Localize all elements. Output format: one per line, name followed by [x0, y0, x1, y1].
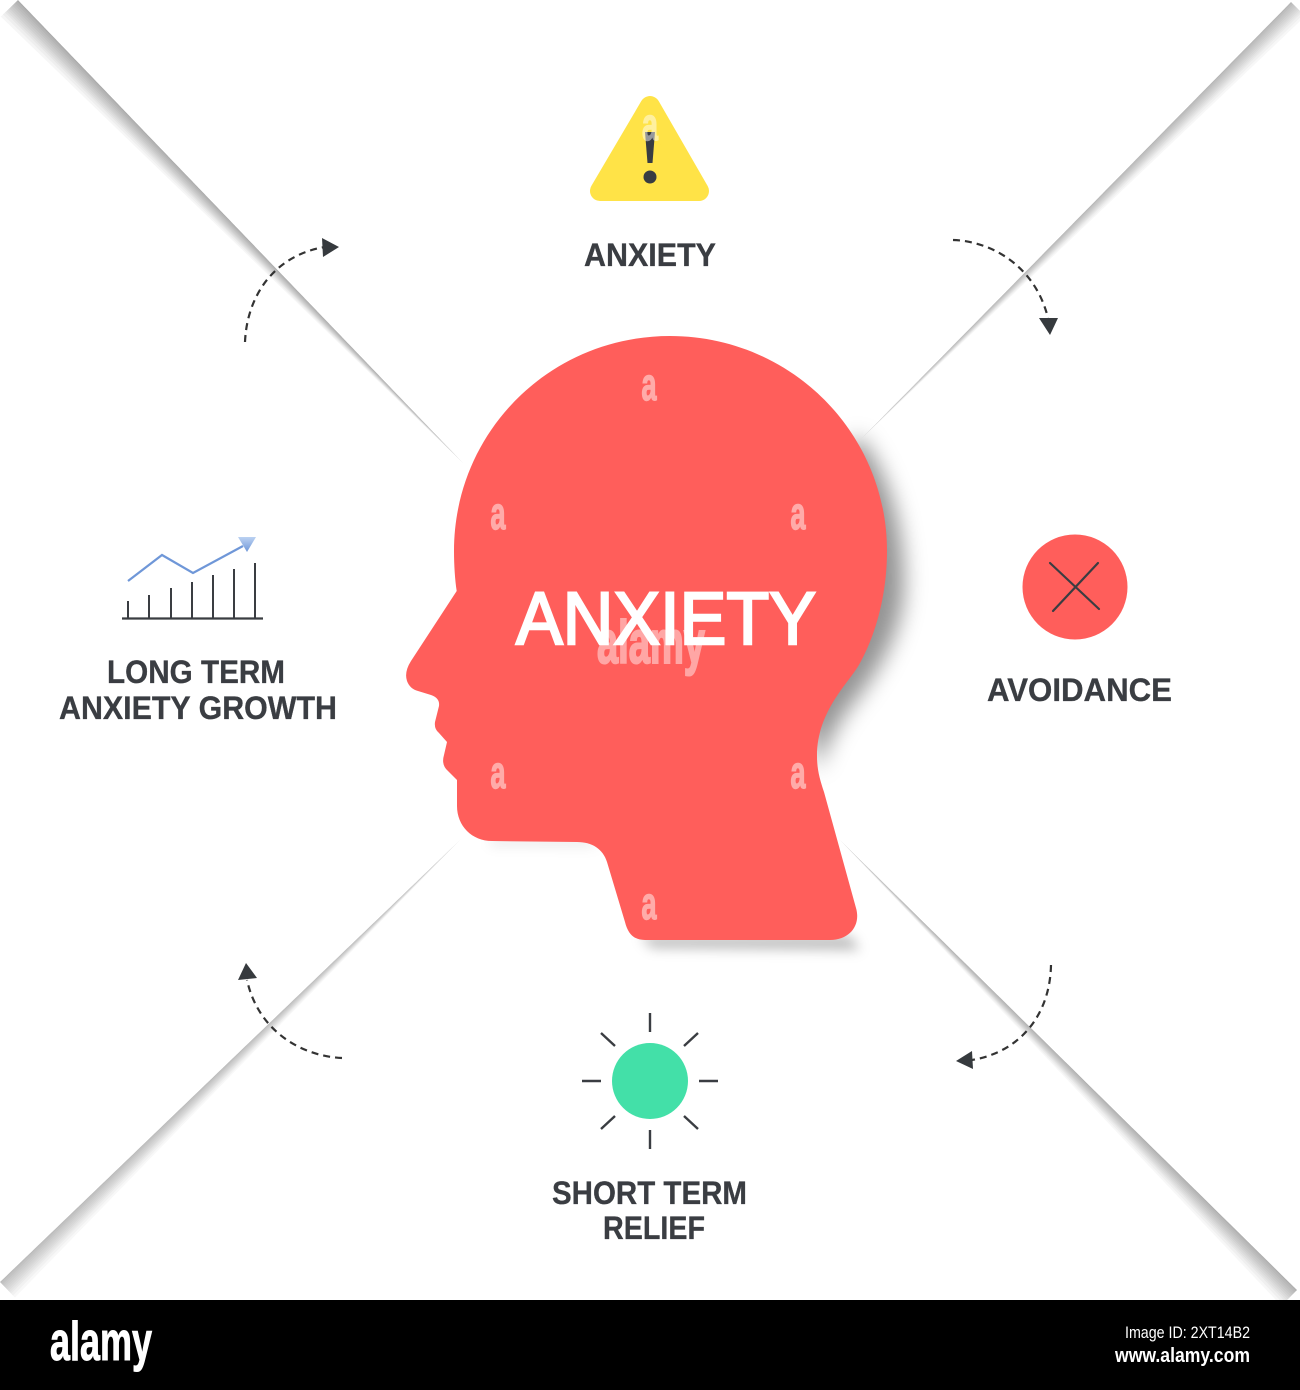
- central title: ANXIETY: [516, 577, 816, 660]
- arrow: growth to anxiety: [245, 238, 339, 342]
- heading: avoidance: AVOIDANCE: [987, 672, 1172, 708]
- heading: short term relief: RELIEF: [603, 1210, 705, 1246]
- arrow: anxiety to avoidance: [953, 240, 1058, 335]
- heading: long term anxiety growth: LONG TERM: [107, 654, 285, 690]
- icon: growth chart: [122, 537, 263, 618]
- heading: anxiety: ANXIETY: [584, 237, 716, 273]
- arrow: avoidance to relief: [956, 965, 1051, 1069]
- arrow: relief to growth: [238, 963, 342, 1058]
- watermark marks: a: [642, 99, 659, 150]
- fold shadow: bottom left: [0, 838, 477, 1298]
- heading: long term anxiety growth: [59, 654, 337, 726]
- fold shadow: top right: [860, 2, 1300, 454]
- watermark marks: a: [490, 747, 506, 798]
- heading: short term relief: [552, 1175, 747, 1246]
- watermark marks: a: [790, 747, 806, 798]
- watermark marks: a: [642, 359, 657, 410]
- icon: sun: [582, 1013, 718, 1149]
- fold shadow: bottom right: [822, 838, 1297, 1306]
- heading: short term relief: SHORT TERM: [552, 1175, 747, 1211]
- fold shadow: top left: [1, 0, 465, 482]
- website: www.alamy.com: [1114, 1345, 1250, 1367]
- image id: Image ID: 2XT14B2: [1125, 1323, 1250, 1342]
- watermark marks: alamy: [597, 609, 705, 676]
- watermark marks: [490, 99, 806, 929]
- head silhouette: [406, 336, 887, 940]
- heading: long term anxiety growth: ANXIETY GROWTH: [59, 690, 337, 726]
- icon: warning triangle: [600, 106, 699, 191]
- head drop shadow: [490, 436, 904, 950]
- icon: cross in circle: [1022, 534, 1128, 640]
- watermark marks: a: [490, 488, 506, 539]
- watermark marks: a: [790, 488, 806, 539]
- watermark marks: a: [642, 878, 657, 929]
- footer logo: alamy: [50, 1310, 152, 1372]
- footer bar: [0, 1300, 1300, 1390]
